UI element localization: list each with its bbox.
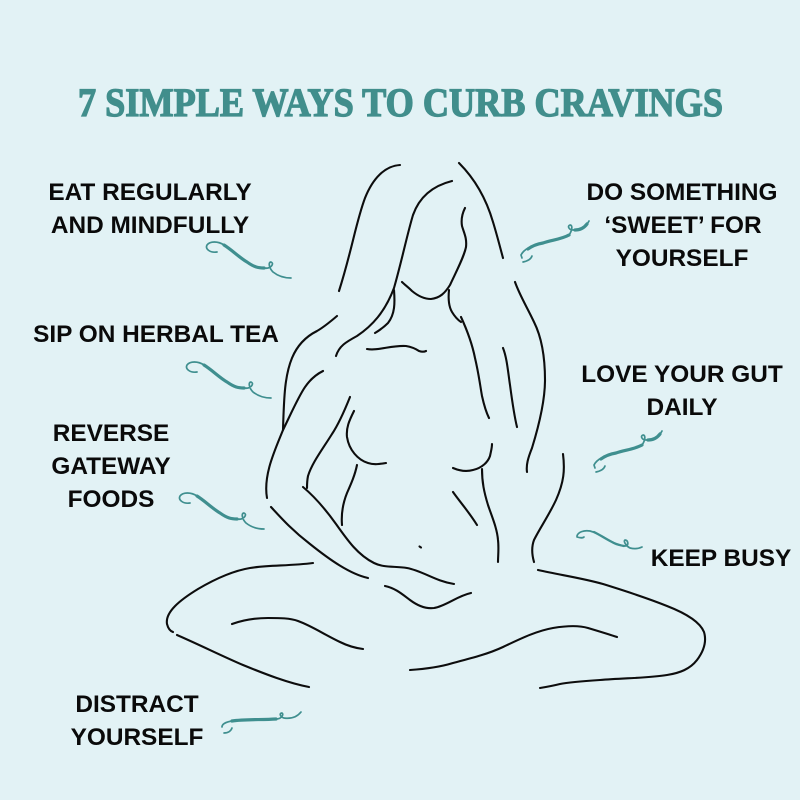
legs xyxy=(167,563,705,688)
label: distract yourself xyxy=(71,691,203,751)
label: reverse gateway foods: FOODS xyxy=(68,486,154,513)
label: love your gut daily: LOVE YOUR GUT xyxy=(581,361,783,388)
face and neck xyxy=(402,208,466,322)
label: eat regularly and mindfully: EAT REGULARLY xyxy=(48,179,252,206)
label: love your gut daily xyxy=(581,361,783,421)
label: distract yourself: DISTRACT xyxy=(75,691,199,718)
swash: distract yourself xyxy=(222,712,301,733)
label: reverse gateway foods: GATEWAY xyxy=(51,453,171,480)
label: keep busy: KEEP BUSY xyxy=(651,545,791,572)
arms and shoulders xyxy=(266,316,564,584)
collarbone xyxy=(367,346,426,352)
line drawing: seated pregnant woman xyxy=(167,163,705,688)
label: reverse gateway foods xyxy=(51,420,171,513)
swash: sip on herbal tea xyxy=(187,362,271,398)
title: 7 SIMPLE WAYS TO CURB CRAVINGS xyxy=(78,80,723,125)
swash: love your gut daily xyxy=(594,431,662,472)
swash: keep busy xyxy=(577,531,642,549)
label: do something sweet for yourself: YOURSELF xyxy=(616,245,748,272)
label: do something sweet for yourself: ‘SWEET’ FOR xyxy=(604,212,762,239)
label: sip on herbal tea: SIP ON HERBAL TEA xyxy=(33,321,279,348)
label: eat regularly and mindfully: AND MINDFULLY xyxy=(51,212,249,239)
swash: eat regularly xyxy=(207,242,291,278)
label: do something sweet for yourself xyxy=(586,179,778,272)
label: distract yourself: YOURSELF xyxy=(71,724,203,751)
swash: do something sweet xyxy=(521,221,589,262)
hair outline xyxy=(336,163,545,472)
label: love your gut daily: DAILY xyxy=(647,394,717,421)
label: reverse gateway foods: REVERSE xyxy=(53,420,169,447)
label: eat regularly and mindfully xyxy=(48,179,252,239)
swash: reverse gateway foods xyxy=(180,493,264,529)
torso and belly xyxy=(342,411,498,608)
label: do something sweet for yourself: DO SOMETHING xyxy=(586,179,778,206)
